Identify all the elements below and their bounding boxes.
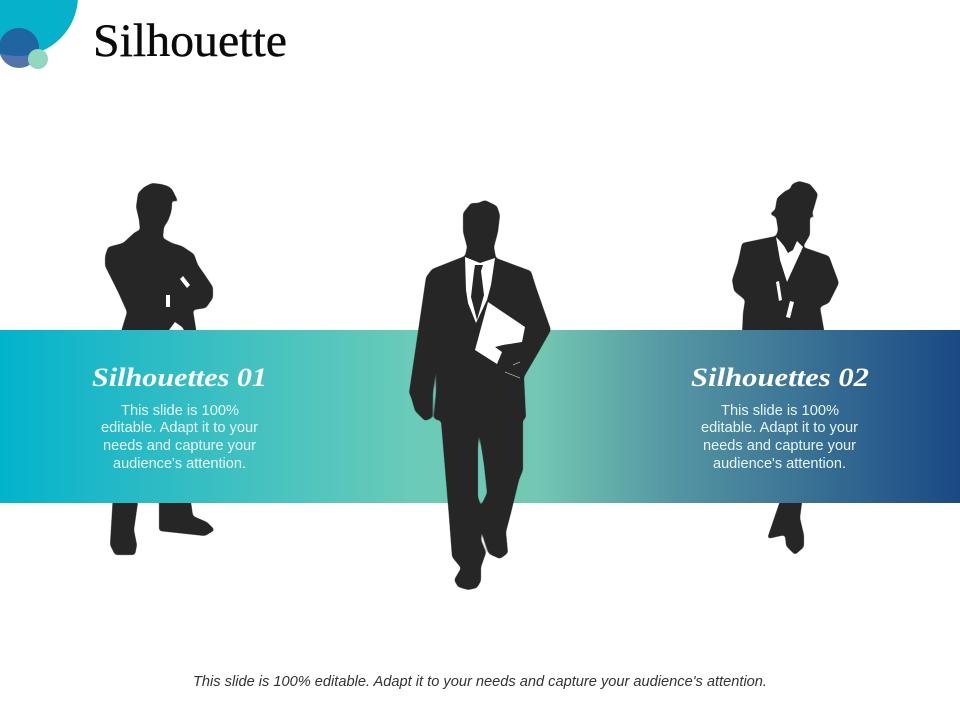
silhouette: right woman, arms crossed (732, 181, 839, 555)
body copy: right: audience's attention. (713, 456, 846, 472)
body copy: left: needs and capture your (103, 438, 256, 454)
title: Silhouette (93, 15, 287, 67)
footer note: This slide is 100% editable. Adapt it to your needs and capture your audience's attention. (193, 674, 767, 690)
text block: Silhouettes 01 (92, 363, 267, 472)
shirt (465, 257, 495, 323)
body copy: right (701, 403, 858, 472)
gradient band (0, 330, 960, 503)
silhouette: left man, arms crossed (105, 183, 215, 555)
hand details (505, 362, 520, 378)
body copy: left: audience's attention. (113, 456, 246, 472)
body copy: right: needs and capture your (703, 438, 856, 454)
folder (475, 302, 525, 364)
silhouette: centre man walking with folder (409, 200, 551, 590)
body copy: left: This slide is 100% (121, 403, 239, 419)
body copy: left (101, 403, 258, 472)
body copy: left: editable. Adapt it to your (101, 420, 258, 436)
heading: Silhouettes 01: Silhouettes 01 (92, 363, 267, 392)
body copy: right: This slide is 100% (721, 403, 839, 419)
body copy: right: editable. Adapt it to your (701, 420, 858, 436)
tie (471, 265, 484, 320)
icon: decorative corner circles (0, 0, 78, 69)
text block: Silhouettes 02 (691, 363, 869, 472)
heading: Silhouettes 02: Silhouettes 02 (691, 363, 869, 392)
